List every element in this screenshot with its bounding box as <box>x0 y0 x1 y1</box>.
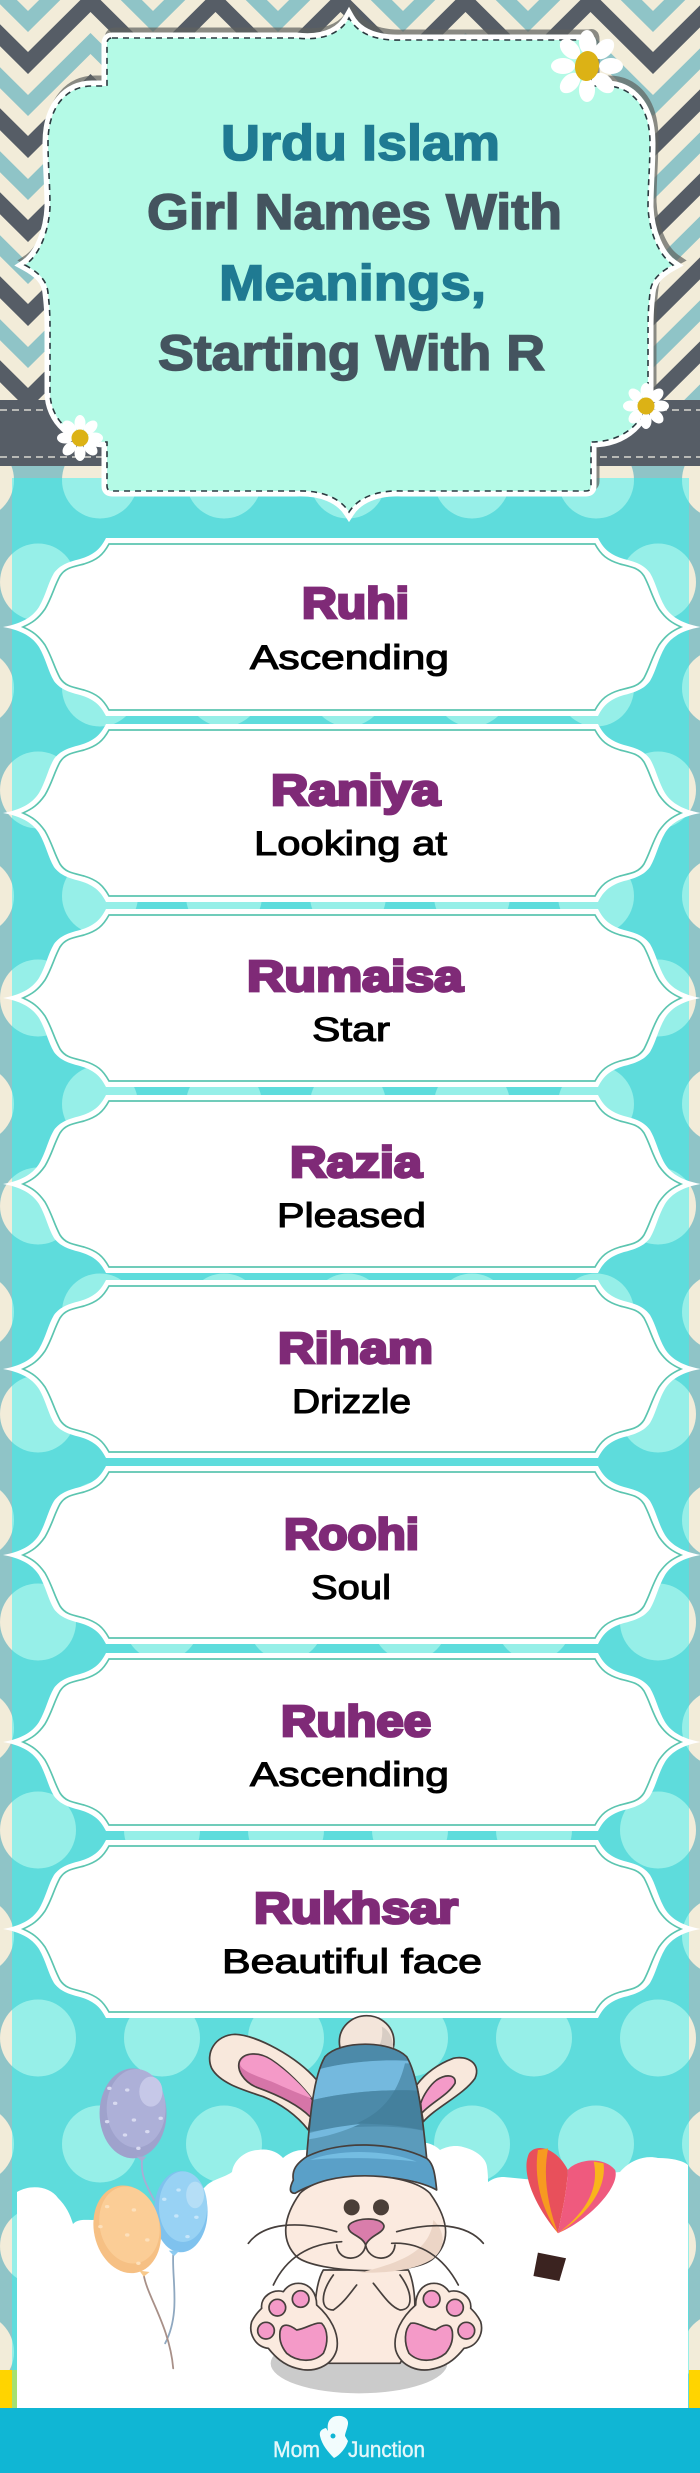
card: Ruhee <box>3 1653 700 1831</box>
logo wordmark: Junction <box>348 2437 425 2462</box>
logo icon <box>320 2416 348 2458</box>
card: Raniya <box>3 724 700 902</box>
balloon strings <box>142 2160 175 2368</box>
card: Roohi <box>3 1466 700 1644</box>
card: Rumaisa: Star <box>312 1011 390 1049</box>
title heading: Urdu Islam <box>221 115 500 171</box>
purple balloon <box>100 2068 167 2162</box>
logo: MomJunction <box>273 2416 425 2462</box>
card: Ruhi: Ascending <box>250 639 449 677</box>
card: Ruhee: Ascending <box>250 1756 449 1794</box>
ground shadow <box>271 2333 447 2393</box>
card: Razia: Pleased <box>277 1197 426 1235</box>
illustration: bunny in blue hat <box>210 2016 483 2393</box>
card: Ruhee: Ruhee <box>281 1698 431 1746</box>
title heading <box>147 115 562 381</box>
title heading: Starting With R <box>158 325 545 381</box>
card: Riham: Drizzle <box>292 1383 411 1421</box>
card: Riham: Riham <box>278 1325 433 1373</box>
icon: small daisy bottom left <box>57 415 103 461</box>
logo wordmark <box>273 2437 425 2462</box>
background: dark ribbon band <box>0 400 700 466</box>
nose <box>348 2219 384 2245</box>
background: teal polka panel <box>12 478 689 2408</box>
card: Ruhi: Ruhi <box>302 580 409 628</box>
orange balloon <box>88 2183 167 2277</box>
illustration: hot air balloon heart <box>526 2148 616 2281</box>
left foot <box>251 2283 337 2370</box>
card: Rukhsar: Beautiful face <box>222 1943 482 1981</box>
card: Raniya: Raniya <box>271 767 441 815</box>
card: Rukhsar: Rukhsar <box>254 1885 458 1933</box>
eyes <box>344 2199 389 2215</box>
card: Razia: Razia <box>290 1139 423 1187</box>
background: chevron pattern <box>0 0 700 402</box>
title panel <box>25 13 676 512</box>
head <box>286 2176 446 2273</box>
left ear <box>210 2034 317 2130</box>
hat <box>290 2040 437 2193</box>
card: Rukhsar <box>3 1840 700 2018</box>
card: Roohi: Roohi <box>284 1511 419 1559</box>
footer bar <box>0 2408 700 2473</box>
basket <box>533 2253 566 2281</box>
mouth and whiskers <box>248 2225 483 2285</box>
icon: small daisy bottom right <box>623 383 669 429</box>
icon: large daisy <box>551 30 623 102</box>
card: Rumaisa <box>3 909 700 1087</box>
heart envelope <box>526 2148 616 2233</box>
right foot <box>395 2283 482 2370</box>
illustration: clouds <box>17 2143 688 2408</box>
card: Razia <box>3 1095 700 1273</box>
card: Riham <box>3 1280 700 1458</box>
title heading: Girl Names With <box>147 184 562 240</box>
title heading: Meanings, <box>219 255 486 311</box>
body <box>315 2270 415 2363</box>
card: Rumaisa: Rumaisa <box>247 953 464 1001</box>
logo wordmark: Mom <box>273 2437 320 2462</box>
illustration: balloons <box>88 2068 208 2368</box>
background: polka side stripes <box>0 466 700 2408</box>
right ear <box>417 2058 477 2122</box>
card: Raniya: Looking at <box>254 825 447 863</box>
hat pompom <box>339 2016 394 2068</box>
arms <box>323 2275 410 2310</box>
card: Roohi: Soul <box>311 1569 391 1607</box>
card: Ruhi <box>3 538 700 716</box>
blue balloon <box>154 2171 208 2256</box>
